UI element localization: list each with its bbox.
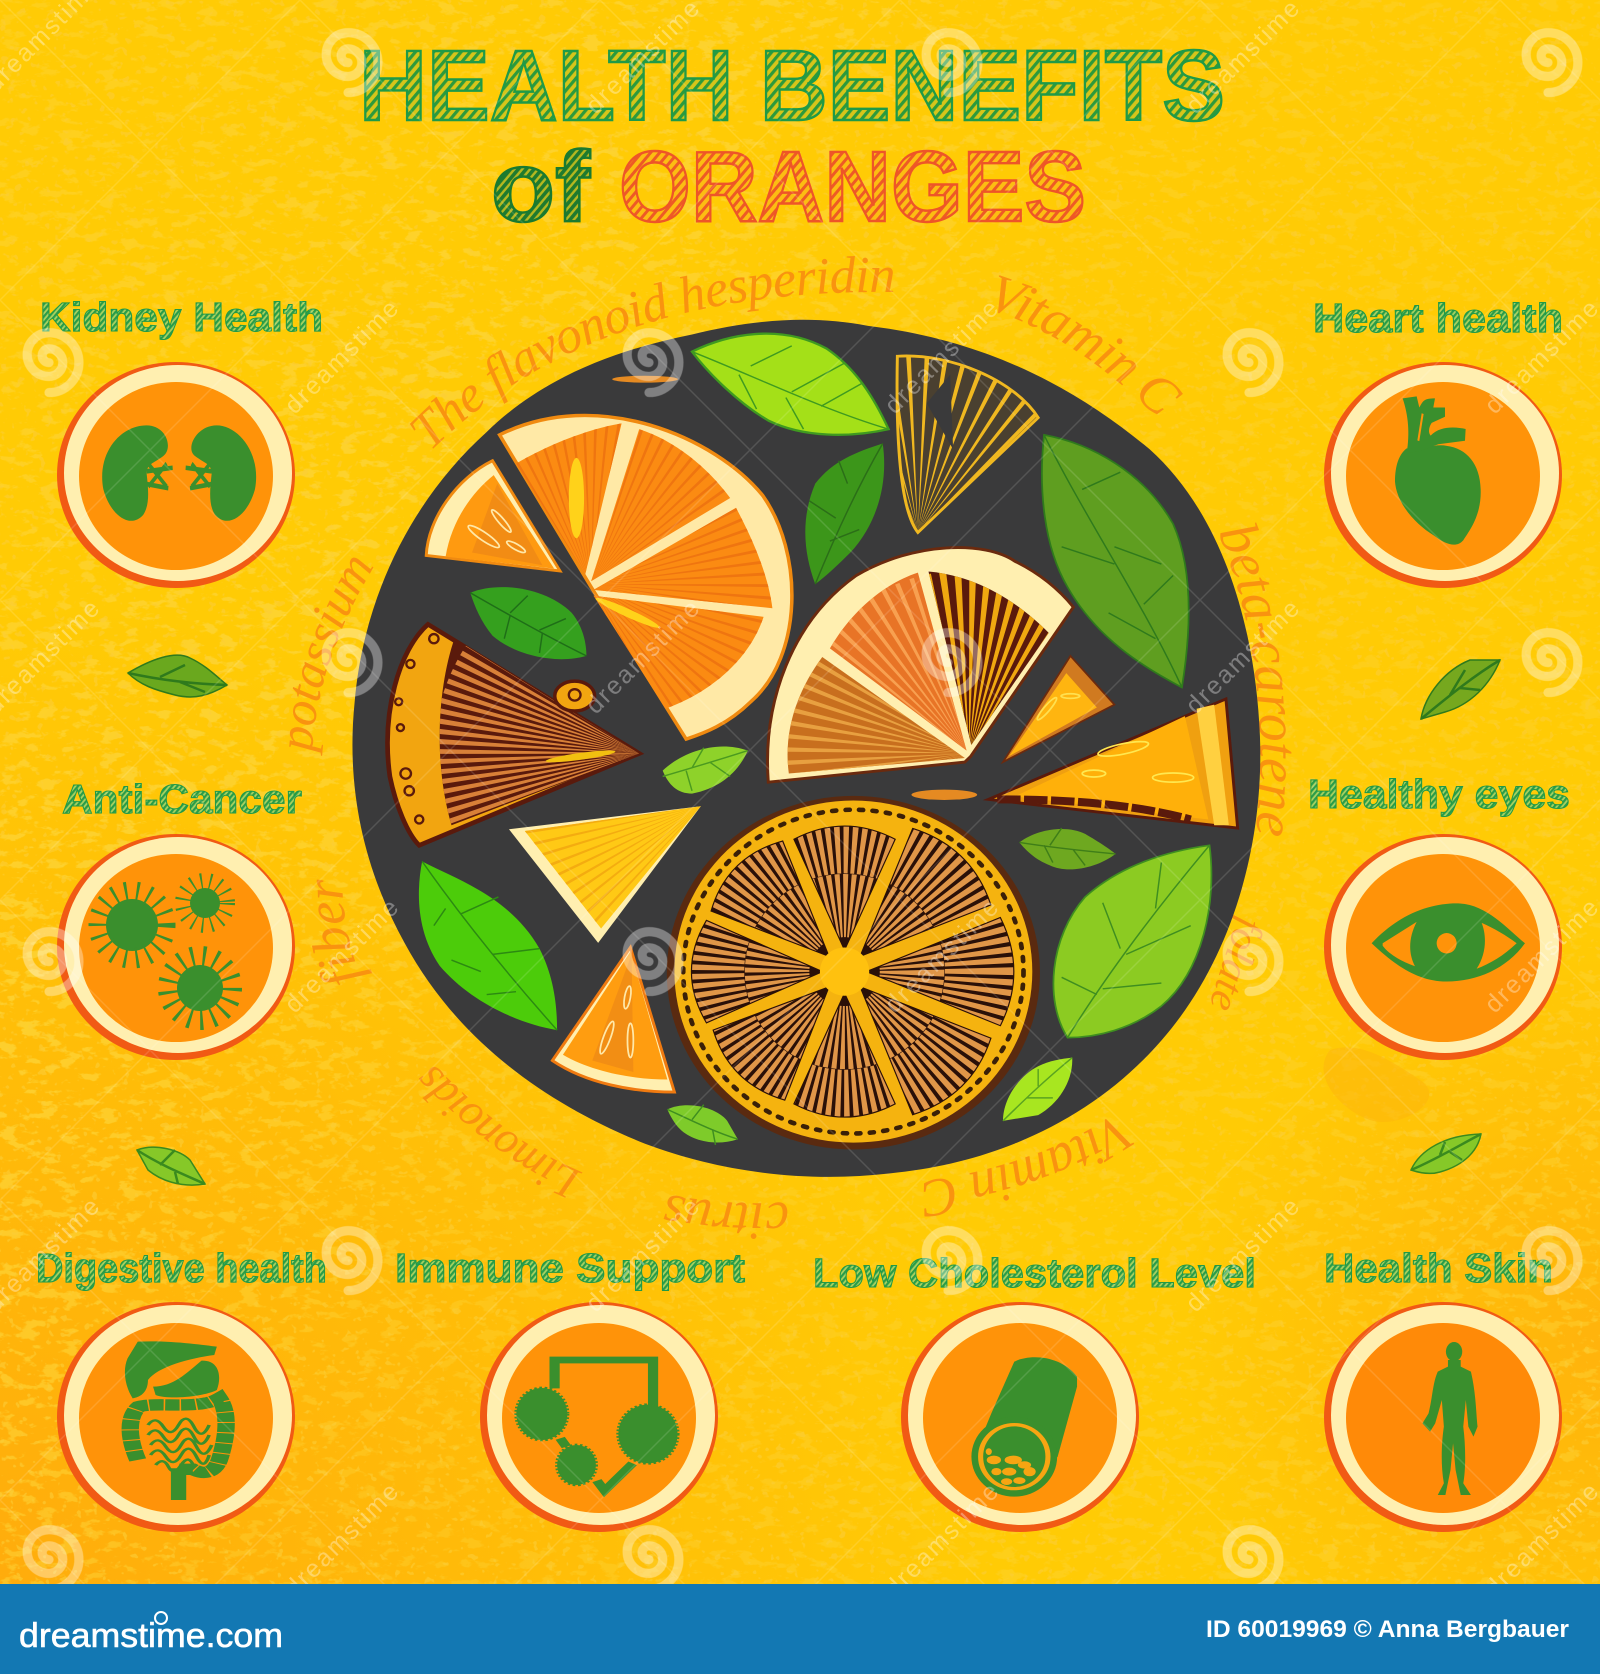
title word: of: of [491,131,591,243]
orange badge [57,1302,295,1532]
footer bar [0,1584,1600,1674]
heading: Kidney Health [40,294,323,340]
watermark: dreamstime [279,1476,405,1602]
watermark: dreamstime [580,593,706,719]
leaf: big bottom left [419,861,557,1030]
watermark: dreamstime [879,293,1005,419]
leaf: lower right small [1003,1058,1072,1121]
footer logo: dreamstime.com [19,1617,283,1655]
panel: immune support [395,1245,745,1532]
leaf: right lower [1411,1134,1481,1173]
curved nutrient words: folate [1211,915,1262,1010]
slice: yellow line art [896,354,1040,535]
leaf: big bottom right [1053,845,1211,1038]
curved nutrient words: potassium [289,558,374,756]
icon: immune cells [516,1360,678,1491]
heading: Heart health [1313,295,1563,341]
panel: low cholesterol level [813,1250,1256,1532]
heading: Healthy eyes [1308,771,1570,817]
orange badge [57,834,295,1060]
curved nutrient words: The flavonoid hesperidin [410,256,894,449]
leaf: small left green [470,587,586,659]
curved nutrient words [289,256,1292,1239]
title [359,30,1225,243]
leaf: small centre [663,746,748,794]
title word: oranges: ORANGES [619,131,1086,243]
leaf: big right olive [1042,435,1189,687]
icon: artery [971,1357,1077,1497]
leaf: top light green [692,334,889,435]
heading: Immune Support [395,1245,745,1291]
slice: large half orange [491,415,792,739]
icon: heart [1395,396,1481,545]
heading: Digestive health [36,1245,327,1291]
curved nutrient words: Limonoids [419,1066,582,1198]
slice: left dark wedge [385,622,644,848]
icon: kidneys [102,425,256,521]
slice: right wedge [988,699,1238,828]
dark plate [352,320,1260,1177]
leaf: small right [1019,828,1116,869]
icon: eye [1372,903,1525,982]
panel: digestive health [36,1245,327,1532]
leaf: right upper [1421,660,1500,719]
watermark: dreamstime [1180,593,1306,719]
leaf: left upper [128,655,227,697]
panel: kidney health [40,294,323,588]
slice: whole orange wheel [667,796,1040,1150]
watermark: dreamstime [580,1191,706,1317]
panel: healthy eyes [1308,771,1570,1060]
panel: health skin [1324,1245,1562,1532]
panel: heart health [1313,295,1563,588]
icon: cancer cells [99,882,232,1020]
panel: anti-cancer [57,776,302,1060]
slice: small top left [426,461,560,571]
slice: yellow wedge [509,806,701,943]
orange badge [1324,1302,1562,1532]
leaf: left lower [137,1147,205,1185]
slice: mixed half orange [766,546,1075,784]
small ember shapes [612,376,977,800]
watermark: dreamstime [1180,1191,1306,1317]
curved nutrient words: fiber [312,880,372,985]
footer credit: ID 60019969 © Anna Bergbauer [1206,1616,1569,1643]
heading: Anti-Cancer [62,776,302,822]
watermark: dreamstime [879,1476,1005,1602]
slice: bottom triangle [552,947,674,1092]
orange badge [57,362,295,588]
curved nutrient words: Vitamin C [998,275,1183,414]
heading: Low Cholesterol Level [813,1250,1256,1296]
curved nutrient words: beta-carotene [1220,522,1292,836]
icon: digestive system [125,1341,226,1500]
icon: human body [1422,1342,1478,1495]
central plate with orange slices and leaves [352,320,1260,1177]
watermark: dreamstime [279,293,405,419]
heading: Health Skin [1324,1245,1553,1291]
slice: small right [1003,656,1114,762]
curved nutrient words: Vitamin C [924,1119,1134,1216]
orange badge [1324,834,1562,1060]
title line: health benefits: HEALTH BENEFITS [359,30,1225,142]
orange badge [901,1302,1139,1532]
watermark: dreamstime [879,892,1005,1018]
leaf: dark green small [805,444,884,584]
watermark: dreamstime [279,892,405,1018]
orange badge [1324,362,1562,588]
leaf: lower centre small [667,1105,738,1145]
curved nutrient words: citrus [664,1196,788,1239]
orange badge [480,1302,718,1532]
